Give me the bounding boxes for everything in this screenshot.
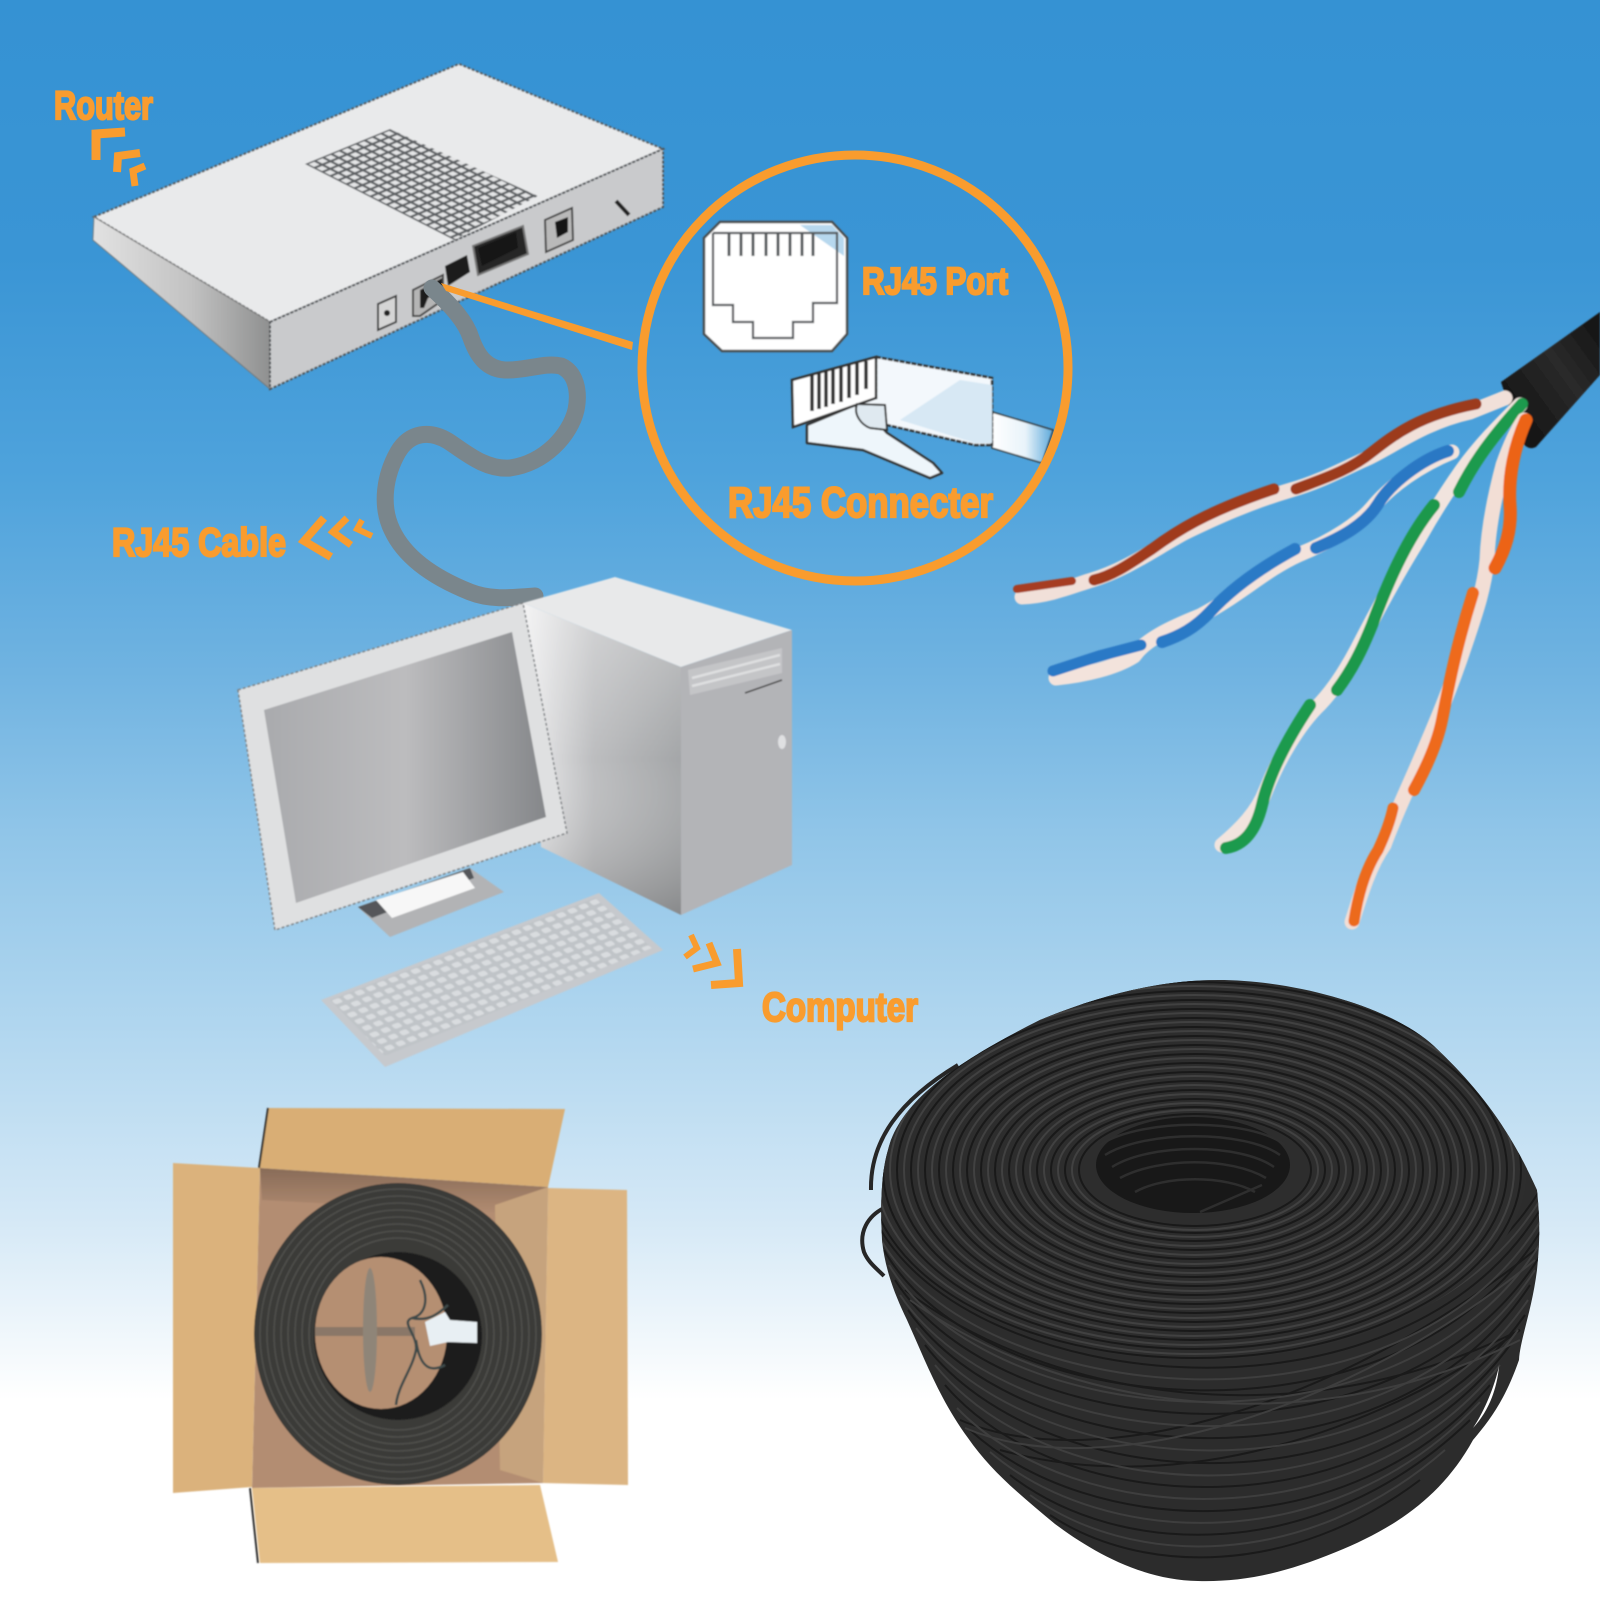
LAN port block xyxy=(413,226,528,316)
illustration: computer xyxy=(238,577,792,1067)
green pair xyxy=(1222,404,1522,848)
tower top xyxy=(523,577,792,667)
arrows: cable chevrons xyxy=(304,518,372,557)
zoom circle xyxy=(642,155,1068,581)
top flap xyxy=(260,1108,565,1187)
loose strand gap xyxy=(1473,1366,1499,1428)
photo: cable spool xyxy=(862,980,1540,1581)
white spool end xyxy=(425,1312,477,1346)
monitor stand xyxy=(358,868,504,937)
label: Router: Router xyxy=(54,84,153,128)
top flap shadow edge xyxy=(259,1108,268,1168)
label: Computer: Computer xyxy=(762,984,918,1030)
monitor screen xyxy=(264,632,546,903)
router back panel xyxy=(270,149,663,389)
icon: RJ45 connector xyxy=(792,357,1053,478)
bottom flap shadow edge xyxy=(250,1488,258,1563)
illustration: router xyxy=(93,64,663,389)
leader line xyxy=(441,283,633,350)
cross support xyxy=(315,1268,415,1392)
orange ring xyxy=(642,155,1068,581)
orange pair xyxy=(1352,420,1526,922)
spool top windings xyxy=(867,980,1527,1360)
illustration: RJ45 cable xyxy=(385,288,577,598)
right flap xyxy=(543,1188,628,1485)
WAN port xyxy=(545,208,573,252)
router left side xyxy=(93,217,270,389)
left flap xyxy=(173,1163,260,1493)
cable end loops xyxy=(396,1280,448,1405)
label: RJ45 Connecter: RJ45 Connecter xyxy=(728,479,993,527)
tower front xyxy=(681,630,792,915)
interior top shadow xyxy=(260,1168,548,1215)
label: RJ45 Port: RJ45 Port xyxy=(862,261,1008,303)
power button xyxy=(778,735,786,749)
loose wire loops xyxy=(862,1065,958,1276)
reset slot xyxy=(616,201,629,215)
box interior xyxy=(252,1168,548,1488)
coiled cable in box xyxy=(254,1183,542,1485)
interior right wall xyxy=(495,1187,548,1483)
blue pair xyxy=(1053,451,1452,678)
monitor bezel xyxy=(238,603,567,930)
arrows: computer chevrons xyxy=(685,935,739,985)
spool body xyxy=(881,980,1539,1581)
router top xyxy=(94,64,663,322)
icon: RJ45 port xyxy=(704,222,847,351)
black sheath xyxy=(1501,312,1600,448)
keyboard xyxy=(321,893,663,1067)
photo: stripped cable xyxy=(1017,312,1600,922)
photo: open box with cable xyxy=(173,1108,628,1563)
tower side xyxy=(523,603,681,915)
bottom flap xyxy=(252,1485,558,1563)
label: RJ45 Cable: RJ45 Cable xyxy=(112,521,286,565)
arrows: router chevrons xyxy=(96,132,145,186)
spool center hole xyxy=(1096,1117,1290,1213)
spool side windings xyxy=(875,1190,1540,1557)
power socket xyxy=(378,296,396,330)
brown pair xyxy=(1017,398,1505,597)
drive bays xyxy=(688,648,782,695)
router vent grid xyxy=(305,129,538,240)
